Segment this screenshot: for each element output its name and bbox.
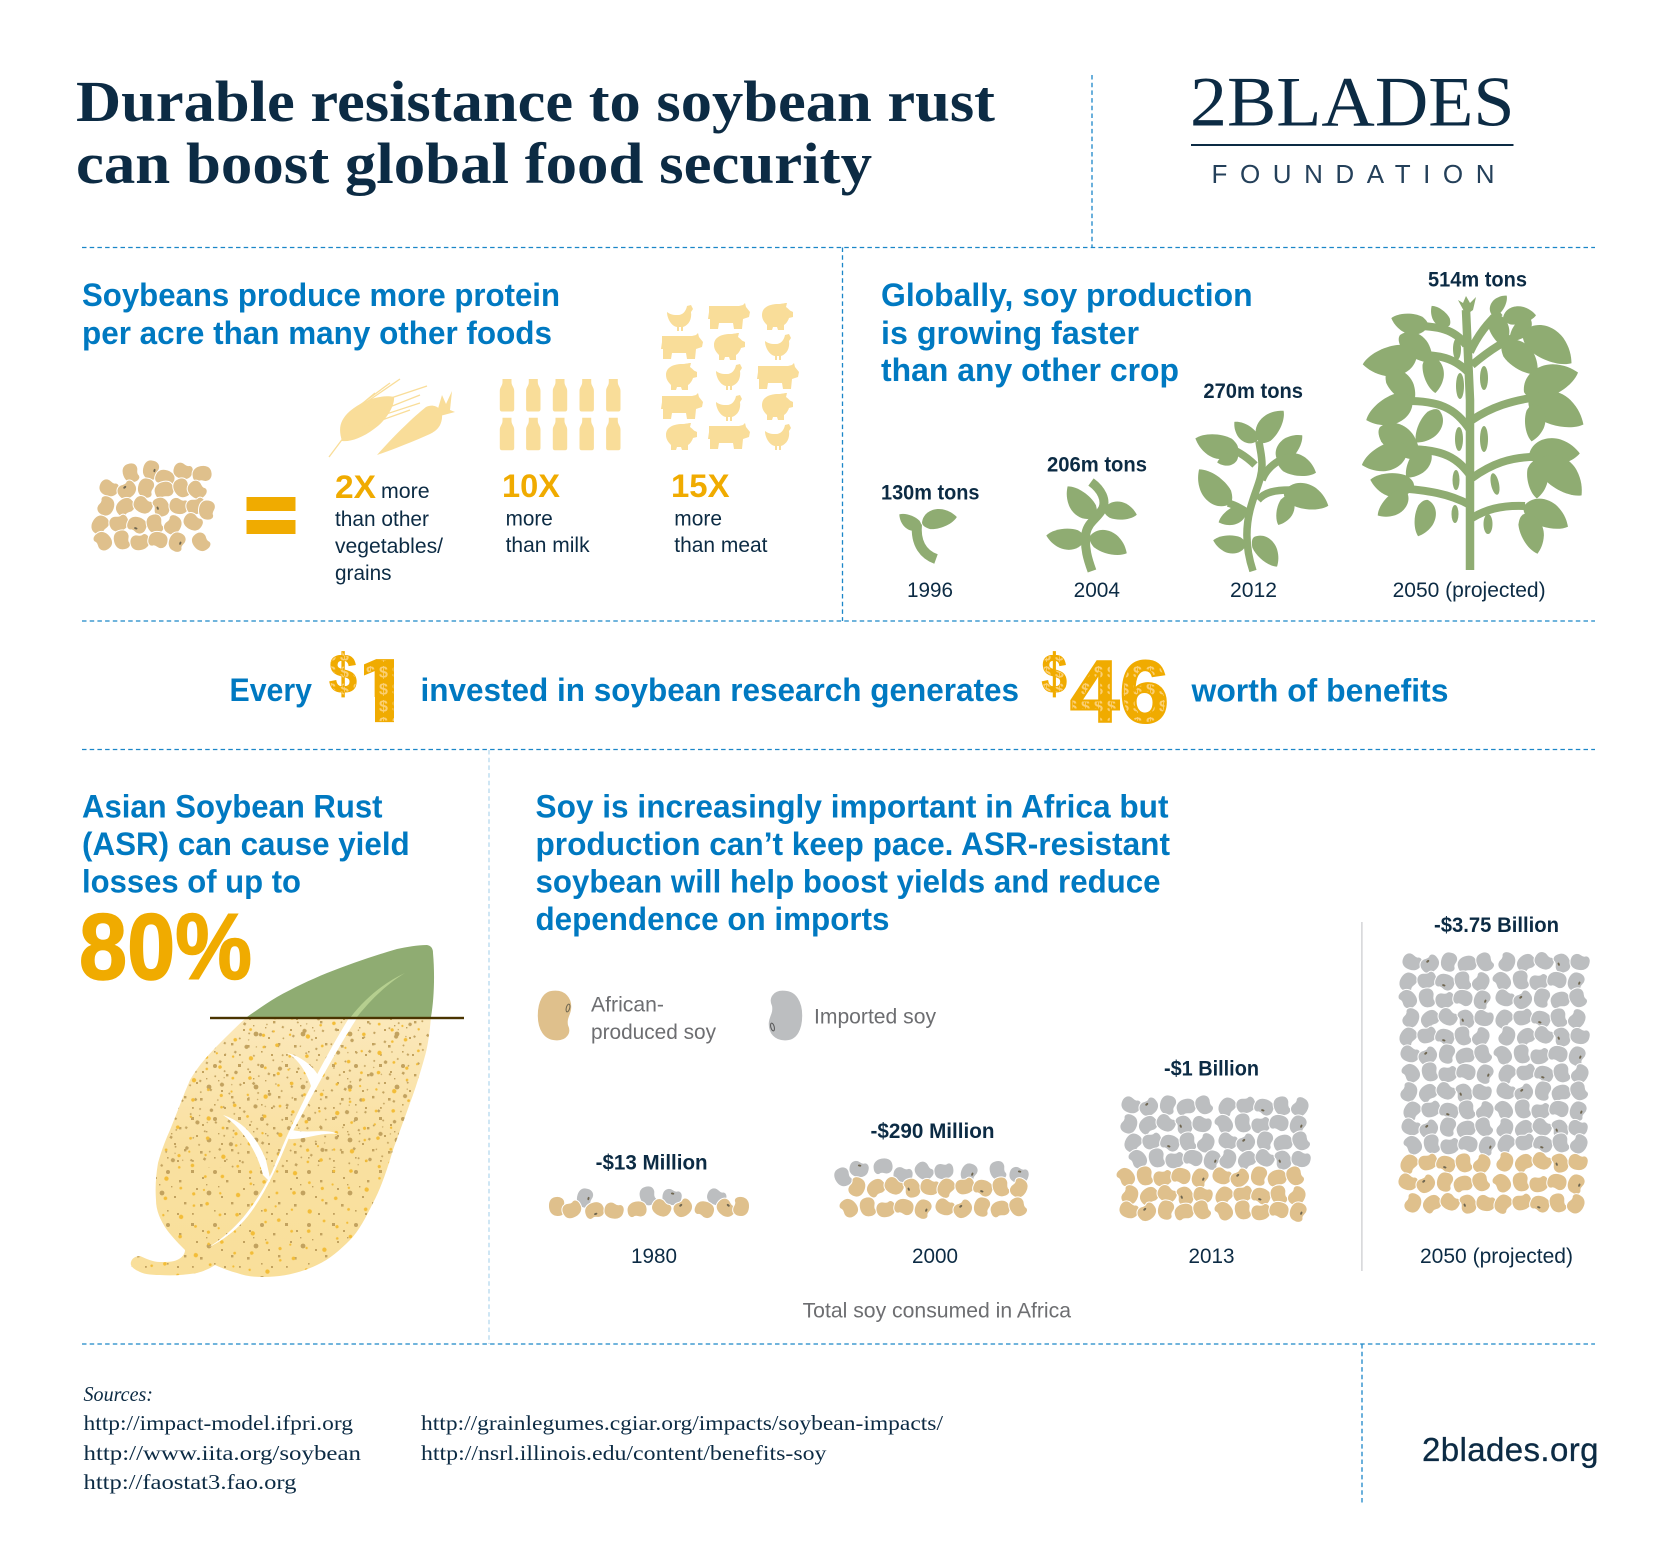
heading: protein: Soybeans produce more protein xyxy=(82,277,560,313)
banner: return on investment: invested in soybean research generates xyxy=(420,672,1019,708)
chart column: 2000: -$290 Million xyxy=(870,1120,994,1143)
heading: yield losses xyxy=(82,788,410,900)
sources: http://www.iita.org/soybean xyxy=(84,1441,362,1465)
legend: Imported soy xyxy=(814,1006,936,1029)
sources: http://grainlegumes.cgiar.org/impacts/soybean-impacts/ xyxy=(421,1411,943,1435)
heading: yield losses: Asian Soybean Rust xyxy=(82,788,383,824)
chart caption: Total soy consumed in Africa xyxy=(803,1300,1071,1322)
stat: 2X vegetables xyxy=(335,469,443,585)
chart column: 1980 xyxy=(548,1151,750,1268)
stat: 15X meat: 15X xyxy=(671,468,730,504)
stat: 15X meat: than meat xyxy=(674,534,768,557)
chart column: 1980: -$13 Million xyxy=(596,1151,708,1174)
icon: rust-infected leaf xyxy=(120,940,464,1283)
icon: milk bottles xyxy=(500,379,620,450)
plant: 2050 projected: 2050 (projected) xyxy=(1393,579,1546,602)
heading: Africa: dependence on imports xyxy=(536,901,890,937)
plant: 2004 xyxy=(1046,453,1147,602)
heading: protein xyxy=(82,277,560,351)
stat: 10X milk: more xyxy=(506,508,553,531)
stat: 2X vegetables: vegetables/ xyxy=(335,535,443,558)
heading: production: Globally, soy production xyxy=(881,277,1253,313)
chart column: 2000 xyxy=(831,1120,1031,1268)
chart column: 1980: 1980 xyxy=(631,1245,677,1268)
stat: 10X milk: than milk xyxy=(506,534,590,557)
chart column: 2050 projected: 2050 (projected) xyxy=(1420,1245,1573,1268)
chart column: 2013: -$1 Billion xyxy=(1164,1058,1259,1080)
stat: 10X milk xyxy=(502,468,590,557)
big number: $1 xyxy=(329,651,394,722)
stat: 2X vegetables: 2X xyxy=(335,469,377,505)
panel: Africa soy consumption xyxy=(536,788,1592,1322)
legend xyxy=(537,989,936,1044)
plant: 2012: 270m tons xyxy=(1203,380,1303,403)
logo: 2Blades Foundation: 2BLADES xyxy=(1190,64,1514,142)
plant: 2012: 2012 xyxy=(1230,579,1277,602)
big number: $1: 1 xyxy=(344,642,420,742)
heading: Africa: Soy is increasingly important in Africa but xyxy=(536,788,1169,824)
plant: 2004: 206m tons xyxy=(1047,453,1147,476)
stat: 80%: 80% xyxy=(79,894,252,999)
chart column: 2013: 2013 xyxy=(1188,1245,1234,1268)
heading: production: is growing faster xyxy=(881,315,1139,351)
heading: Africa xyxy=(536,788,1170,937)
stat: 10X milk: 10X xyxy=(502,468,561,504)
sources: http://impact-model.ifpri.org xyxy=(84,1411,354,1435)
plant: 1996 seedling: 130m tons xyxy=(881,482,980,505)
icon: soybean pile xyxy=(88,459,216,555)
plant: 2050 projected xyxy=(1358,268,1594,602)
heading: Africa: soybean will help boost yields and reduce xyxy=(536,864,1160,900)
chart column: 2000: 2000 xyxy=(912,1245,958,1268)
axis divider before projection xyxy=(1361,922,1362,1271)
title: can boost global food security xyxy=(76,131,872,196)
panel: Asian soybean rust xyxy=(79,788,464,1283)
plant: 1996 seedling: 1996 xyxy=(907,579,953,602)
legend: produced soy xyxy=(591,1021,716,1044)
heading: yield losses: losses of up to xyxy=(82,864,301,900)
stat: 15X meat xyxy=(671,468,768,557)
heading: yield losses: (ASR) can cause yield xyxy=(82,826,410,862)
icon: farm animals grid xyxy=(661,303,799,450)
sources: http://nsrl.illinois.edu/content/benefits-soy xyxy=(421,1441,827,1465)
banner: return on investment: Every xyxy=(230,672,312,708)
banner: return on investment: worth of benefits xyxy=(1191,672,1448,708)
title: Durable resistance to soybean rust xyxy=(76,69,996,134)
big number: $46: 46 xyxy=(1070,642,1169,741)
icon: equals sign xyxy=(246,497,296,534)
chart column: 2013 xyxy=(1113,1058,1313,1268)
icon: wheat and carrot xyxy=(329,379,455,457)
website link: 2blades.org xyxy=(1422,1431,1598,1468)
stat: 2X vegetables: than other xyxy=(335,508,429,531)
sources xyxy=(84,1382,943,1494)
big number: $46: $ xyxy=(1042,642,1067,705)
panel: protein per acre xyxy=(82,277,799,585)
plant: 2004: 2004 xyxy=(1074,579,1120,602)
sources: http://faostat3.fao.org xyxy=(84,1470,297,1494)
panel: global soy production xyxy=(881,268,1594,602)
chart column: 2050 projected xyxy=(1395,914,1592,1268)
legend: African- xyxy=(591,993,664,1016)
title xyxy=(76,69,996,196)
plant: 2050 projected: 514m tons xyxy=(1428,268,1527,292)
stat: 2X vegetables: grains xyxy=(335,562,392,585)
sources: Sources: xyxy=(84,1382,153,1406)
banner: return on investment xyxy=(232,651,1448,724)
heading: Africa: production can’t keep pace. ASR-resistant xyxy=(536,826,1170,862)
plant: 1996 seedling xyxy=(881,482,980,602)
stat: 2X vegetables: more xyxy=(381,480,430,503)
plant: 2012 xyxy=(1187,380,1332,602)
chart column: 2050 projected: -$3.75 Billion xyxy=(1434,914,1559,937)
heading: protein: per acre than many other foods xyxy=(82,315,552,351)
heading: production xyxy=(881,277,1253,388)
logo: 2Blades Foundation xyxy=(1190,64,1514,189)
stat: 15X meat: more xyxy=(674,508,722,531)
big number: $1: $ xyxy=(329,642,357,705)
heading: production: than any other crop xyxy=(881,352,1179,388)
logo: 2Blades Foundation: FOUNDATION xyxy=(1212,159,1494,189)
